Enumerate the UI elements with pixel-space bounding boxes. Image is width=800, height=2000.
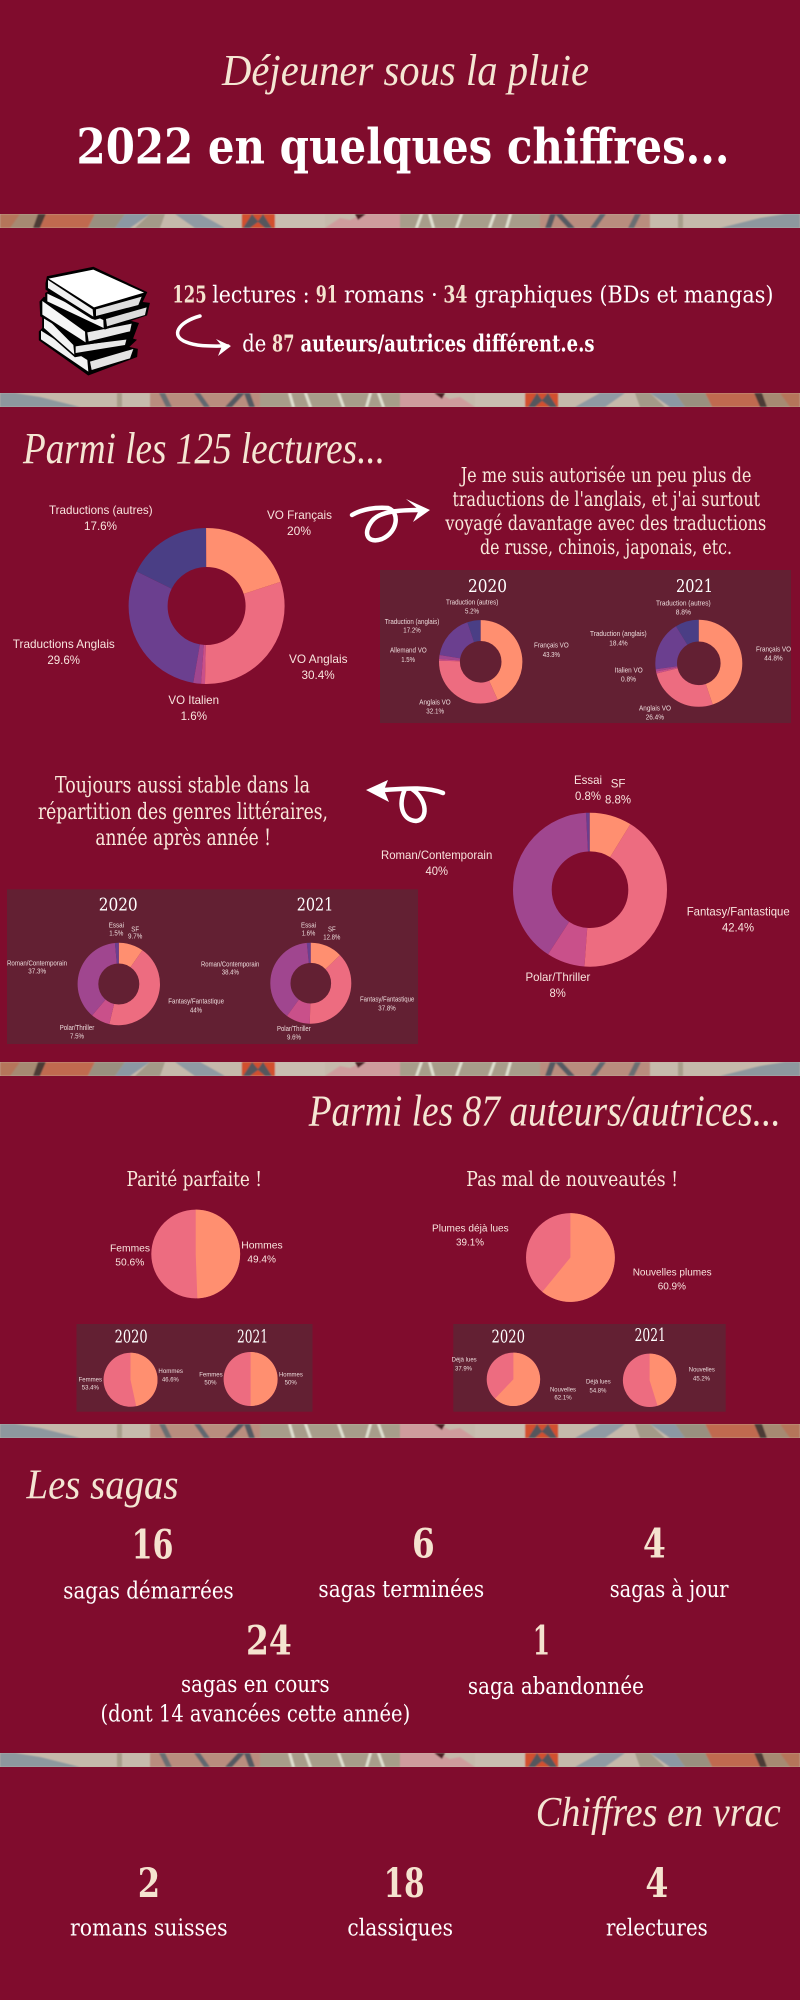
panel: genres 2020 and 2021: 7.5% xyxy=(70,1032,85,1041)
pie chart: gender 2022: 49.4% xyxy=(247,1254,276,1266)
text: language commentary xyxy=(445,463,766,559)
arrow: curved to authors count xyxy=(178,316,231,356)
panel: genres 2020 and 2021: 37.3% xyxy=(28,967,47,976)
panel: genres 2020 and 2021: Essai xyxy=(109,921,124,930)
panel: genres 2020 and 2021: 1.6% xyxy=(302,929,316,938)
authors count xyxy=(242,331,595,358)
panel: new authors 2020 and 2021: 2021 xyxy=(635,1325,666,1346)
donut chart: genres 2022: Roman/Contemporain xyxy=(381,848,492,862)
panel: language 2020 and 2021: Français VO xyxy=(534,641,569,650)
panel: language 2020 and 2021: 43.3% xyxy=(543,650,561,659)
key reading counts: 34 xyxy=(443,282,467,309)
donut chart: genres 2022: 40% xyxy=(426,864,448,878)
panel: new authors 2020 and 2021: 2020 xyxy=(492,1327,525,1348)
authors count: de xyxy=(242,332,266,358)
panel: genres 2020 and 2021: Fantasy/Fantastique xyxy=(168,997,224,1006)
panel: genres 2020 and 2021: 37.8% xyxy=(378,1004,396,1013)
panel: language 2020 and 2021: 0.8% xyxy=(621,675,637,684)
stat: sagas en cours xyxy=(100,1618,410,1728)
donut chart: genres 2022: Fantasy/Fantastique xyxy=(687,905,790,919)
heading: parmi les 125 lectures: Parmi les 125 lectures... xyxy=(22,424,385,473)
panel: genres 2020 and 2021: 9.6% xyxy=(287,1033,302,1042)
panel: new authors 2020 and 2021: Nouvelles xyxy=(550,1387,576,1394)
stat: saga abandonnée: 1 xyxy=(533,1618,550,1665)
panel: language 2020 and 2021: 17.2% xyxy=(403,626,421,635)
stat: classiques xyxy=(347,1860,453,1942)
heading: les sagas: Les sagas xyxy=(26,1462,179,1508)
subheading: nouveautés: Pas mal de nouveautés ! xyxy=(466,1167,678,1191)
panel: gender 2020 and 2021: Femmes xyxy=(79,1377,102,1384)
panel: genres 2020 and 2021: Polar/Thriller xyxy=(60,1023,95,1032)
panel: genres 2020 and 2021: 2021 xyxy=(297,895,333,916)
key reading counts: 91 xyxy=(316,282,338,309)
panel: genres 2020 and 2021: 9.7% xyxy=(128,932,143,941)
arrow: swirl left xyxy=(366,780,443,821)
panel: gender 2020 and 2021: 53.4% xyxy=(82,1384,99,1391)
key reading counts xyxy=(172,282,773,309)
text: genre commentary: répartition des genres littéraires, xyxy=(38,800,328,825)
donut chart: language 2022: 30.4% xyxy=(302,668,335,682)
stat: saga abandonnée: saga abandonnée xyxy=(468,1674,644,1700)
panel: genres 2020 and 2021: Fantasy/Fantastique xyxy=(360,995,414,1004)
panel: language 2020 and 2021: Traduction (anglais) xyxy=(385,617,439,626)
stat: relectures: 4 xyxy=(645,1860,668,1907)
panel: language 2020 and 2021: Anglais VO xyxy=(639,703,671,712)
donut chart: language 2022 xyxy=(13,503,348,723)
stat: sagas terminées xyxy=(318,1521,484,1603)
donut chart: language 2022: VO Italien xyxy=(168,693,219,707)
donut chart: language 2022: 29.6% xyxy=(47,653,80,667)
panel: new authors 2020 and 2021: 62.1% xyxy=(554,1395,572,1402)
stat: sagas à jour xyxy=(610,1521,729,1603)
panel: language 2020 and 2021: 1.5% xyxy=(401,655,416,664)
authors count: auteurs/autrices différent.e.s xyxy=(300,331,594,358)
donut chart: genres 2022: Polar/Thriller xyxy=(526,970,590,984)
donut chart: genres 2022: Essai xyxy=(574,773,602,787)
panel: genres 2020 and 2021: 38.4% xyxy=(222,968,240,977)
panel: gender 2020 and 2021: 50% xyxy=(285,1379,297,1386)
panel: new authors 2020 and 2021: Déjà lues xyxy=(452,1357,477,1364)
icon: stack of books xyxy=(39,267,149,375)
panel: gender 2020 and 2021: 2020 xyxy=(115,1327,148,1348)
panel: genres 2020 and 2021: Roman/Contemporain xyxy=(7,959,67,968)
panel: gender 2020 and 2021: 46.6% xyxy=(162,1377,179,1384)
donut chart: language 2022: VO Anglais xyxy=(289,652,348,666)
pie chart: new authors 2022: Nouvelles plumes xyxy=(633,1267,712,1279)
donut chart: genres 2022: 42.4% xyxy=(722,921,754,935)
text: language commentary: de russe, chinois, japonais, etc. xyxy=(480,535,732,559)
panel: genres 2020 and 2021: 2020 xyxy=(99,895,138,916)
pie chart: new authors 2022: 39.1% xyxy=(456,1237,484,1249)
subheading: parité: Parité parfaite ! xyxy=(126,1167,262,1191)
pie chart: gender 2022: Femmes xyxy=(110,1243,150,1255)
panel: new authors 2020 and 2021: Déjà lues xyxy=(586,1379,611,1386)
stat: sagas en cours: (dont 14 avancées cette année) xyxy=(100,1702,410,1728)
pie chart: new authors 2022 xyxy=(432,1213,712,1302)
stat: classiques: 18 xyxy=(384,1860,424,1907)
donut chart: genres 2022: SF xyxy=(611,777,626,791)
stat: sagas démarrées xyxy=(63,1522,234,1605)
panel: genres 2020 and 2021: SF xyxy=(328,925,336,934)
stat: romans suisses: 2 xyxy=(138,1860,160,1907)
text: genre commentary: Toujours aussi stable dans la xyxy=(55,774,310,799)
panel: genres 2020 and 2021: SF xyxy=(131,925,140,934)
panel: language 2020 and 2021: 2021 xyxy=(676,576,713,597)
blog name: Déjeuner sous la pluie xyxy=(221,46,589,95)
panel: gender 2020 and 2021: Femmes xyxy=(199,1372,223,1379)
panel: gender 2020 and 2021 xyxy=(76,1324,312,1412)
key reading counts: lectures : xyxy=(212,283,310,309)
panel: language 2020 and 2021 xyxy=(380,570,791,723)
panel: new authors 2020 and 2021: Nouvelles xyxy=(689,1367,715,1374)
donut chart: genres 2022: 0.8% xyxy=(575,789,601,803)
donut chart: language 2022: VO Français xyxy=(267,508,332,522)
panel: genres 2020 and 2021 xyxy=(7,889,418,1044)
panel: genres 2020 and 2021: Essai xyxy=(301,921,316,930)
arrow: swirl right xyxy=(352,499,430,540)
stat: sagas en cours: sagas en cours xyxy=(181,1672,330,1698)
donut chart: genres 2022: 8% xyxy=(550,986,566,1000)
donut chart: language 2022: 1.6% xyxy=(181,709,207,723)
pie chart: gender 2022: Hommes xyxy=(241,1240,283,1252)
panel: new authors 2020 and 2021: 45.2% xyxy=(693,1376,710,1383)
pie chart: gender 2022 xyxy=(110,1210,283,1298)
panel: gender 2020 and 2021: Hommes xyxy=(158,1368,183,1375)
stat: saga abandonnée xyxy=(468,1618,644,1700)
panel: genres 2020 and 2021: Roman/Contemporain xyxy=(201,960,259,969)
panel: language 2020 and 2021: 5.2% xyxy=(465,607,480,616)
panel: language 2020 and 2021: 8.8% xyxy=(676,608,692,617)
panel: new authors 2020 and 2021: 37.9% xyxy=(455,1366,472,1373)
stat: relectures xyxy=(606,1860,708,1942)
key reading counts: romans · xyxy=(344,283,438,309)
panel: genres 2020 and 2021: Polar/Thriller xyxy=(277,1024,311,1033)
donut chart: genres 2022 xyxy=(381,773,790,1000)
panel: language 2020 and 2021: Traduction (autres) xyxy=(656,599,711,608)
stat: sagas terminées: 6 xyxy=(412,1521,435,1568)
panel: new authors 2020 and 2021: 54.8% xyxy=(590,1388,607,1395)
panel: genres 2020 and 2021: 12.8% xyxy=(323,933,341,942)
stat: sagas à jour: 4 xyxy=(643,1521,666,1568)
panel: gender 2020 and 2021: Hommes xyxy=(279,1372,303,1379)
panel: language 2020 and 2021: 44.8% xyxy=(764,654,783,663)
panel: language 2020 and 2021: Français VO xyxy=(756,645,791,654)
panel: language 2020 and 2021: 26.4% xyxy=(646,713,665,722)
donut chart: genres 2022: 8.8% xyxy=(605,793,631,807)
panel: gender 2020 and 2021: 2021 xyxy=(237,1327,268,1348)
panel: language 2020 and 2021: Traduction (anglais) xyxy=(590,629,647,638)
panel: gender 2020 and 2021: 50% xyxy=(204,1379,217,1386)
stat: sagas à jour: sagas à jour xyxy=(610,1577,729,1603)
key reading counts: 125 xyxy=(172,282,207,309)
stat: romans suisses xyxy=(70,1860,228,1942)
stat: sagas démarrées: 16 xyxy=(132,1522,174,1569)
panel: genres 2020 and 2021: 44% xyxy=(190,1006,203,1015)
pie chart: new authors 2022: 60.9% xyxy=(658,1281,686,1293)
panel: language 2020 and 2021: Traduction (autres) xyxy=(446,598,498,607)
donut chart: language 2022: 17.6% xyxy=(84,519,117,533)
key reading counts: graphiques (BDs et mangas) xyxy=(474,283,774,309)
authors count: 87 xyxy=(272,331,294,358)
donut chart: language 2022: 20% xyxy=(287,524,311,538)
panel: language 2020 and 2021: 32.1% xyxy=(426,707,445,716)
stat: romans suisses: romans suisses xyxy=(70,1916,228,1942)
panel: language 2020 and 2021: Anglais VO xyxy=(419,698,451,707)
panel: genres 2020 and 2021: 1.5% xyxy=(109,929,124,938)
panel: language 2020 and 2021: 2020 xyxy=(468,576,507,597)
donut chart: language 2022: Traductions Anglais xyxy=(13,637,115,651)
text: genre commentary xyxy=(38,774,328,851)
panel: new authors 2020 and 2021 xyxy=(452,1324,726,1412)
panel: language 2020 and 2021: Allemand VO xyxy=(390,646,427,655)
heading: chiffres en vrac: Chiffres en vrac xyxy=(536,1790,781,1836)
text: genre commentary: année après année ! xyxy=(95,826,271,851)
stat: relectures: relectures xyxy=(606,1916,708,1942)
pie chart: gender 2022: 50.6% xyxy=(115,1257,144,1269)
stat: sagas en cours: 24 xyxy=(246,1618,292,1665)
pie chart: new authors 2022: Plumes déjà lues xyxy=(432,1223,509,1235)
panel: language 2020 and 2021: Italien VO xyxy=(615,666,643,675)
stat: sagas démarrées: sagas démarrées xyxy=(63,1579,234,1605)
stat: sagas terminées: sagas terminées xyxy=(318,1577,484,1603)
panel: language 2020 and 2021: 18.4% xyxy=(609,639,628,648)
donut chart: language 2022: Traductions (autres) xyxy=(49,503,153,517)
stat: classiques: classiques xyxy=(347,1916,453,1942)
